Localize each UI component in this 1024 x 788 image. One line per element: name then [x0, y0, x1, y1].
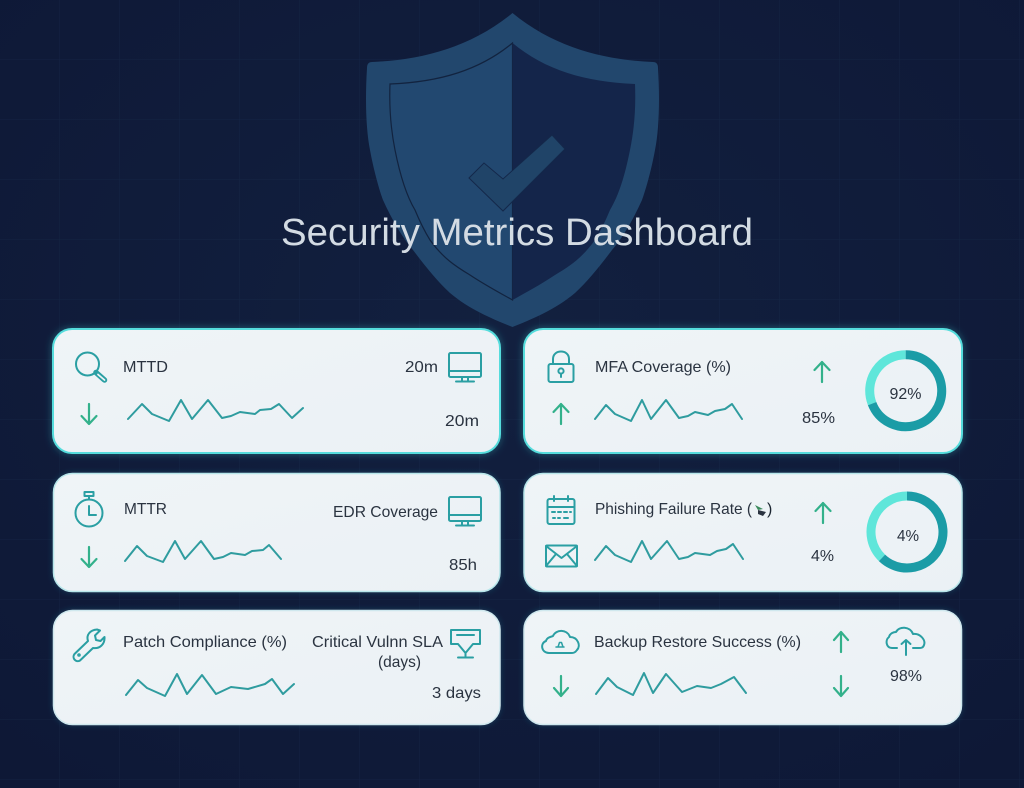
value: 3 days: 3 days	[432, 685, 481, 702]
icon: shield watermark	[366, 13, 659, 327]
donut: 4%	[871, 496, 943, 568]
donut: 92%: 92%	[890, 386, 922, 403]
sparkline: phishing	[595, 541, 743, 562]
sparkline: MFA	[595, 400, 742, 421]
icon: stopwatch	[76, 492, 102, 526]
arrow: down	[82, 404, 96, 424]
icon: wrench	[74, 630, 105, 661]
value: 98%: 98%	[890, 668, 922, 685]
icon: check mark	[469, 135, 565, 211]
panel: MTTR and EDR Coverage	[54, 474, 500, 592]
icon: funnel monitor	[451, 630, 480, 658]
panel: Phishing Failure Rate	[524, 474, 962, 592]
panel: MTTD	[53, 329, 500, 453]
sparkline: backup	[596, 673, 746, 695]
panel: Backup Restore Success	[524, 610, 962, 724]
value: 85h: 85h	[449, 557, 477, 574]
label: Phishing Failure Rate: Phishing Failure Rate (	[595, 501, 753, 518]
label: EDR Coverage: EDR Coverage	[333, 504, 438, 521]
label: Backup Restore Success: Backup Restore Success (%)	[594, 634, 801, 651]
icon: monitor	[449, 353, 481, 382]
value: 20m top: 20m	[405, 359, 438, 376]
icon: magnifier	[76, 352, 104, 380]
arrow: up	[814, 362, 830, 382]
icon: cloud upload	[887, 628, 924, 655]
icon: calendar	[548, 496, 574, 524]
icon: envelope	[546, 546, 577, 566]
label: days: (days)	[378, 654, 421, 671]
arrow: down	[554, 676, 568, 696]
arrow: up	[816, 503, 830, 523]
arrow: down	[82, 547, 96, 567]
arrow: up	[554, 404, 568, 424]
label: Critical Vuln SLA: Critical Vulnn SLA	[312, 634, 443, 651]
icon: monitor	[449, 497, 481, 526]
icon: lock	[548, 352, 574, 382]
label: MTTR: MTTR	[124, 501, 167, 518]
panel: Patch Compliance and Critical Vuln SLA	[54, 610, 500, 724]
value: 85%: 85%	[802, 410, 835, 427]
value: 4%: 4%	[811, 548, 834, 565]
icon: cloud	[542, 631, 579, 653]
label: closing paren: )	[767, 501, 772, 518]
sparkline: MTTD	[128, 400, 303, 421]
label: Patch Compliance: Patch Compliance (%)	[123, 634, 287, 651]
arrow: down	[834, 676, 848, 696]
label: MFA Coverage: MFA Coverage (%)	[595, 359, 731, 376]
sparkline: patch	[126, 674, 294, 696]
sparkline: MTTR	[125, 541, 281, 562]
value: 20m: 20m	[445, 413, 479, 430]
panel: MFA Coverage	[524, 329, 962, 453]
title: Security Metrics Dashboard	[281, 212, 753, 254]
icon: stray glyph	[755, 505, 766, 516]
arrow: up	[834, 632, 848, 652]
label: MTTD: MTTD	[123, 359, 168, 376]
donut: 4%: 4%	[897, 528, 919, 545]
donut: 92%	[870, 355, 942, 427]
